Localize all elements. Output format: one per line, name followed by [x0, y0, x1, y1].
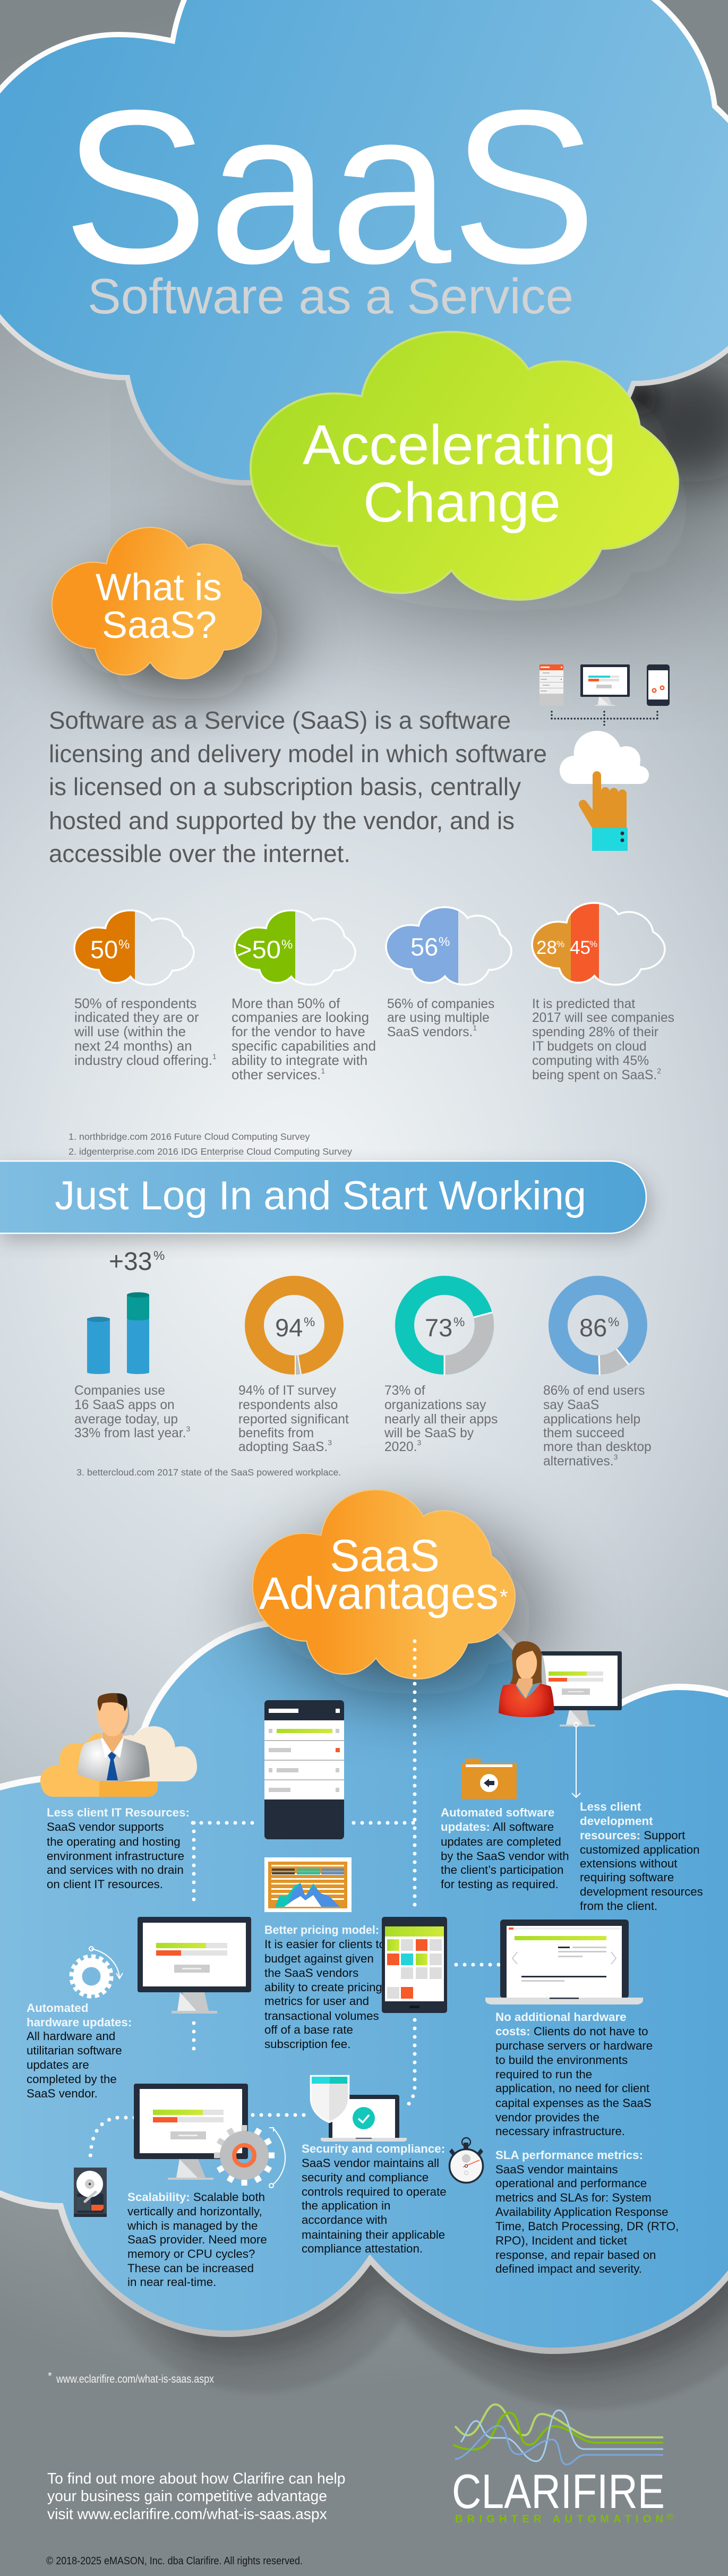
stat: +33% with cylinders: Companies use: [74, 1384, 165, 1398]
text: automated software updates: for testing as required.: [441, 1878, 559, 1891]
stat: 28% and 45%: 2: [657, 1067, 661, 1075]
green cloud: Accelerating Change: Accelerating: [303, 414, 616, 476]
banner: Just Log In and Start Working: Just Log In and Start Working: [55, 1173, 586, 1218]
text: SLA performance metrics: SLA performance metrics:: [495, 2148, 643, 2162]
icon: devices connected to cloud: [539, 664, 670, 851]
definition paragraph: licensing and delivery model in which software: [49, 740, 547, 767]
stat: >50%: other services.: [232, 1067, 325, 1082]
definition paragraph: accessible over the internet.: [49, 840, 350, 867]
stat: 56%: SaaS vendors.: [387, 1023, 477, 1039]
stat: >50%: for the vendor to have: [232, 1025, 365, 1039]
stat: 50%: 1: [212, 1052, 217, 1061]
subtitle: Software as a Service: [88, 268, 573, 324]
logo: Clarifire: [452, 2404, 673, 2525]
icon: shield with laptop: [311, 2076, 407, 2142]
stat: 94% donut: benefits from: [238, 1426, 314, 1440]
stat: 86% donut: applications help: [543, 1412, 640, 1427]
icon: pointing hand: [579, 771, 628, 851]
stat: 86% donut: them succeed: [543, 1426, 624, 1440]
text: scalability: Scalability: Scalable both: [127, 2190, 265, 2204]
text: less client development resources: from the client.: [580, 1899, 657, 1913]
orange cloud: What is SaaS?: [52, 527, 261, 679]
text: SLA performance metrics: operational and performance: [495, 2177, 647, 2190]
orange cloud: What is SaaS?: SaaS?: [102, 604, 217, 646]
footnotes 1 and 2: 1. northbridge.com 2016 Future Cloud Computing Survey: [68, 1131, 310, 1142]
logo: Clarifire: ®: [666, 2512, 673, 2522]
text: better pricing model: [264, 1923, 386, 2051]
stat: 28% and 45%: %: [589, 939, 597, 949]
icon: monitor: [541, 1651, 622, 1726]
icon: monitor with gray gear: [134, 2084, 285, 2188]
text: no additional hardware costs: capital expenses as the SaaS: [495, 2096, 652, 2110]
text: less client development resources: Less client: [580, 1800, 641, 1813]
text: less client IT resources: environment infrastructure: [47, 1849, 184, 1863]
stat: 28% and 45%: 45: [570, 937, 590, 958]
stat: 94% donut: adopting SaaS.: [238, 1438, 332, 1454]
icon: desktop monitor: [580, 664, 630, 706]
stat: 86% donut: alternatives.: [543, 1453, 618, 1469]
asterisk footnote: *: [48, 2370, 52, 2382]
text: scalability: memory or CPU cycles?: [127, 2247, 255, 2261]
stat: 56%: 56% of companies: [387, 997, 494, 1011]
text: better pricing model: metrics for user and: [264, 1994, 369, 2008]
stat: 86% donut: 86% of end users: [543, 1384, 645, 1398]
orange cloud: What is SaaS?: What is: [96, 567, 222, 609]
stat: 94% donut: [238, 1285, 349, 1454]
stat: 94% donut: 3: [328, 1438, 332, 1447]
icon: man with cloud: [40, 1693, 197, 1797]
stat: 86% donut: more than desktop: [543, 1440, 652, 1454]
text: less client development resources: customized application: [580, 1843, 700, 1856]
stat: 73% donut: 2020.: [384, 1438, 422, 1454]
text: better pricing model: Better pricing model:: [264, 1923, 379, 1937]
asterisk footnote: [48, 2370, 214, 2385]
stat: >50%: [232, 910, 376, 1082]
text: security and compliance: the application in: [302, 2199, 390, 2212]
stat: 50%: %: [118, 937, 130, 952]
blue hero cloud with title: [0, 0, 728, 498]
icon: stopwatch: [449, 2138, 483, 2183]
text: automated software updates: the client’s participation: [441, 1863, 563, 1876]
text: automated hardware updates: utilitarian software: [27, 2044, 122, 2057]
stat: 73% donut: 73: [425, 1313, 452, 1342]
stat: +33% with cylinders: average today, up: [74, 1412, 178, 1427]
stat: +33% with cylinders: 3: [186, 1425, 190, 1433]
stat: 94% donut: respondents also: [238, 1398, 338, 1412]
title: SaaS: SaaS: [63, 65, 597, 309]
stat: 28% and 45%: computing with 45%: [532, 1054, 649, 1068]
panel: large blue advantages cloud: [0, 1591, 728, 2351]
text: scalability: SaaS provider. Need more: [127, 2233, 267, 2246]
stat: 28% and 45%: 28: [536, 937, 557, 958]
text: scalability: in near real-time.: [127, 2275, 216, 2289]
text: security and compliance: compliance attestation.: [302, 2242, 423, 2255]
stat: 94% donut: 94% of IT survey: [238, 1384, 337, 1398]
shadows of header clouds: [73, 356, 728, 704]
stat: 73% donut: %: [453, 1315, 465, 1329]
text: automated software updates: Automated software: [441, 1806, 554, 1819]
text: less client development resources: resources: Support: [580, 1829, 685, 1842]
orange cloud: SaaS Advantages: Advantages: [259, 1568, 499, 1619]
icon: white cloud: [560, 731, 649, 784]
stat: 50%: will use (within the: [74, 1025, 186, 1039]
text: automated software updates: updates are completed: [441, 1835, 561, 1848]
definition paragraph: [49, 706, 547, 867]
text: security and compliance: security and compliance: [302, 2171, 429, 2184]
stat: +33% with cylinders: %: [153, 1249, 165, 1263]
text: SLA performance metrics: RPO), Incident and ticket: [495, 2234, 628, 2247]
text: scalability: which is managed by the: [127, 2219, 258, 2232]
text: less client development resources: development: [580, 1814, 653, 1828]
text: SLA performance metrics: metrics and SLAs for: System: [495, 2191, 652, 2204]
logo: Clarifire: BRIGHTER AUTOMATION: [455, 2513, 663, 2525]
text: automated software updates: by the SaaS vendor with: [441, 1849, 569, 1863]
definition paragraph: is licensed on a subscription basis, centrally: [49, 773, 521, 800]
icon: monitor with gear: [72, 1917, 251, 2014]
dotted connector: [552, 712, 657, 726]
stat: 50%: [74, 910, 217, 1068]
icon: white gear: [72, 1947, 123, 1996]
stat: 94% donut: 94: [275, 1313, 303, 1342]
stat: 28% and 45%: 2017 will see companies: [532, 1011, 674, 1025]
text: better pricing model: subscription fee.: [264, 2037, 350, 2051]
text: SLA performance metrics: Time, Batch Processing, DR (RTO,: [495, 2220, 679, 2233]
text: SLA performance metrics: SaaS vendor maintains: [495, 2163, 618, 2176]
shadow of advantages cloud: [273, 1511, 536, 1700]
stat: 56%: 1: [473, 1023, 477, 1032]
text: less client development resources: extensions without: [580, 1857, 678, 1870]
text: security and compliance: SaaS vendor maintains all: [302, 2156, 439, 2170]
text: less client IT resources: Less client IT Resources:: [47, 1806, 190, 1819]
definition paragraph: Software as a Service (SaaS) is a software: [49, 706, 511, 734]
dots over orange cloud: [413, 1641, 416, 1678]
stat: 56%: %: [439, 935, 450, 949]
stat: 56%: 56: [410, 933, 438, 961]
text: security and compliance: maintaining their applicable: [302, 2228, 445, 2241]
arrow: monitor to less client development: [572, 1722, 580, 1797]
icon: cream cloud behind man: [122, 1726, 197, 1781]
text: less client IT resources: SaaS vendor supports: [47, 1820, 164, 1833]
stat: 73% donut: organizations say: [384, 1398, 486, 1412]
stat: 28% and 45%: being spent on SaaS.: [532, 1067, 661, 1082]
stat: >50%: >50: [237, 935, 281, 963]
text: automated hardware updates: completed by the: [27, 2072, 117, 2086]
stat: 86% donut: [543, 1285, 652, 1469]
text: better pricing model: off of a base rate: [264, 2023, 353, 2036]
text: better pricing model: ability to create pricing: [264, 1981, 382, 1994]
icon: hard drive: [74, 2168, 107, 2217]
icon: woman at monitor: [499, 1641, 622, 1726]
text: better pricing model: transactional volumes: [264, 2009, 379, 2023]
stat: 50%: next 24 months) an: [74, 1039, 192, 1054]
dotted connectors: [90, 1641, 504, 2161]
closing call to action: To find out more about how Clarifire can help: [47, 2470, 346, 2487]
text: no additional hardware costs: to build the environments: [495, 2053, 628, 2067]
icon: laptop: [485, 1920, 643, 2004]
stat: 28% and 45%: %: [556, 939, 564, 949]
asterisk footnote: www.eclarifire.com/what-is-saas.aspx: [56, 2373, 214, 2385]
text: SLA performance metrics: defined impact and severity.: [495, 2262, 642, 2275]
footnote 3: 3. bettercloud.com 2017 state of the SaaS powered workplace.: [76, 1467, 341, 1478]
text: better pricing model: It is easier for clients to: [264, 1938, 386, 1951]
icon: mobile list device: [264, 1700, 344, 1839]
stat: +33% with cylinders: 33% from last year.: [74, 1425, 190, 1440]
text: scalability: vertically and horizontally,: [127, 2205, 262, 2218]
stat: >50%: ability to integrate with: [232, 1053, 367, 1068]
text: automated hardware updates: SaaS vendor.: [27, 2087, 98, 2100]
text: better pricing model: the SaaS vendors: [264, 1966, 358, 1980]
stat: +33% with cylinders: +33: [109, 1248, 152, 1276]
bar chart: cylinders: [87, 1292, 149, 1374]
stat: 94% donut: %: [304, 1315, 315, 1329]
stat: 50%: indicated they are or: [74, 1010, 199, 1025]
stat: 28% and 45%: IT budgets on cloud: [532, 1039, 647, 1054]
stat: +33% with cylinders: 16 SaaS apps on: [74, 1398, 175, 1412]
stat: 73% donut: will be SaaS by: [384, 1426, 474, 1440]
text: no additional hardware costs: purchase servers or hardware: [495, 2039, 653, 2052]
stat: 56%: [386, 907, 511, 1039]
footnotes 1 and 2: 2. idgenterprise.com 2016 IDG Enterprise Cloud Computing Survey: [68, 1146, 352, 1157]
stat: 86% donut: 3: [614, 1453, 618, 1461]
icon: folder: [461, 1759, 517, 1799]
stat: 73% donut: 73% of: [384, 1384, 425, 1398]
icon: gray gear with orange ring: [214, 2125, 285, 2188]
stat: 73% donut: 3: [417, 1438, 422, 1447]
green cloud: Accelerating Change: Change: [363, 471, 561, 534]
text: less client IT resources: the operating and hosting: [47, 1835, 181, 1848]
text: less client development resources: requiring software: [580, 1871, 674, 1884]
text: security and compliance: Security and compliance:: [302, 2142, 445, 2155]
definition paragraph: hosted and supported by the vendor, and is: [49, 807, 515, 834]
orange cloud: SaaS Advantages: SaaS: [330, 1531, 440, 1581]
green cloud: Accelerating Change: [251, 332, 678, 600]
text: less client IT resources: and services with no drain: [47, 1863, 184, 1876]
text: no additional hardware costs: vendor provides the: [495, 2111, 599, 2124]
icon: tablet: [382, 1917, 447, 2013]
closing call to action: your business gain competitive advantage: [47, 2487, 327, 2504]
icon: smartphone: [647, 664, 670, 706]
banner: Just Log In and Start Working: [0, 1161, 650, 1241]
text: automated hardware updates: updates are: [27, 2058, 89, 2071]
text: no additional hardware costs: application, no need for client: [495, 2082, 650, 2095]
text: automated hardware updates: All hardware and: [27, 2029, 115, 2043]
stat: 28% and 45%: [532, 903, 674, 1082]
stat: +33% with cylinders: [74, 1248, 190, 1440]
stat: >50%: companies are looking: [232, 1010, 369, 1025]
logo waves: [453, 2404, 663, 2464]
text: less client IT resources: on client IT resources.: [47, 1878, 163, 1891]
stat: >50%: 1: [321, 1067, 325, 1075]
stat: 50%: industry cloud offering.: [74, 1052, 217, 1068]
copyright: © 2018-2025 eMASON, Inc. dba Clarifire. All rights reserved.: [46, 2555, 303, 2567]
text: no additional hardware costs: necessary infrastructure.: [495, 2125, 625, 2138]
text: automated software updates: updates: All software: [441, 1820, 554, 1833]
icon: orange cloud behind man: [40, 1733, 158, 1797]
text: no additional hardware costs: costs: Clients do not have to: [495, 2025, 648, 2038]
stat: 73% donut: [384, 1285, 498, 1454]
stat: 94% donut: reported significant: [238, 1412, 349, 1427]
stat: 86% donut: %: [608, 1315, 619, 1329]
stat: 28% and 45%: spending 28% of their: [532, 1025, 658, 1039]
stat: 73% donut: nearly all their apps: [384, 1412, 498, 1427]
stat: >50%: %: [281, 937, 293, 952]
text: less client development resources: development resources: [580, 1885, 703, 1898]
stat: >50%: More than 50% of: [232, 996, 340, 1011]
text: no additional hardware costs: required to run the: [495, 2068, 592, 2081]
logo: Clarifire: CLARIFIRE: [452, 2465, 665, 2519]
stat: 50%: 50% of respondents: [74, 996, 196, 1011]
icon: tablet list: [539, 664, 563, 706]
stat: >50%: specific capabilities and: [232, 1039, 376, 1054]
text: SLA performance metrics: response, and repair based on: [495, 2248, 656, 2262]
text: security and compliance: accordance with: [302, 2213, 387, 2227]
text: security and compliance: controls required to operate: [302, 2185, 447, 2198]
text: no additional hardware costs: No additional hardware: [495, 2010, 627, 2024]
text: better pricing model: budget against given: [264, 1952, 374, 1965]
text: automated hardware updates: Automated: [27, 2001, 88, 2015]
stat: 50%: 50: [90, 935, 118, 963]
text: scalability: These can be increased: [127, 2262, 254, 2275]
orange cloud: SaaS Advantages: [253, 1490, 515, 1679]
text: SLA performance metrics: Availability Application Response: [495, 2205, 669, 2219]
stat: 86% donut: 86: [579, 1313, 607, 1342]
shadow of lower cloud: [99, 2265, 728, 2408]
stat: 56%: are using multiple: [387, 1011, 490, 1025]
closing call to action: visit www.eclarifire.com/what-is-saas.aspx: [47, 2505, 327, 2522]
text: automated hardware updates: hardware updates:: [27, 2016, 132, 2029]
orange cloud: SaaS Advantages: *: [500, 1585, 508, 1609]
stat: 28% and 45%: It is predicted that: [532, 997, 635, 1011]
stat: 86% donut: say SaaS: [543, 1398, 599, 1412]
icon: chart report: [264, 1857, 352, 1912]
